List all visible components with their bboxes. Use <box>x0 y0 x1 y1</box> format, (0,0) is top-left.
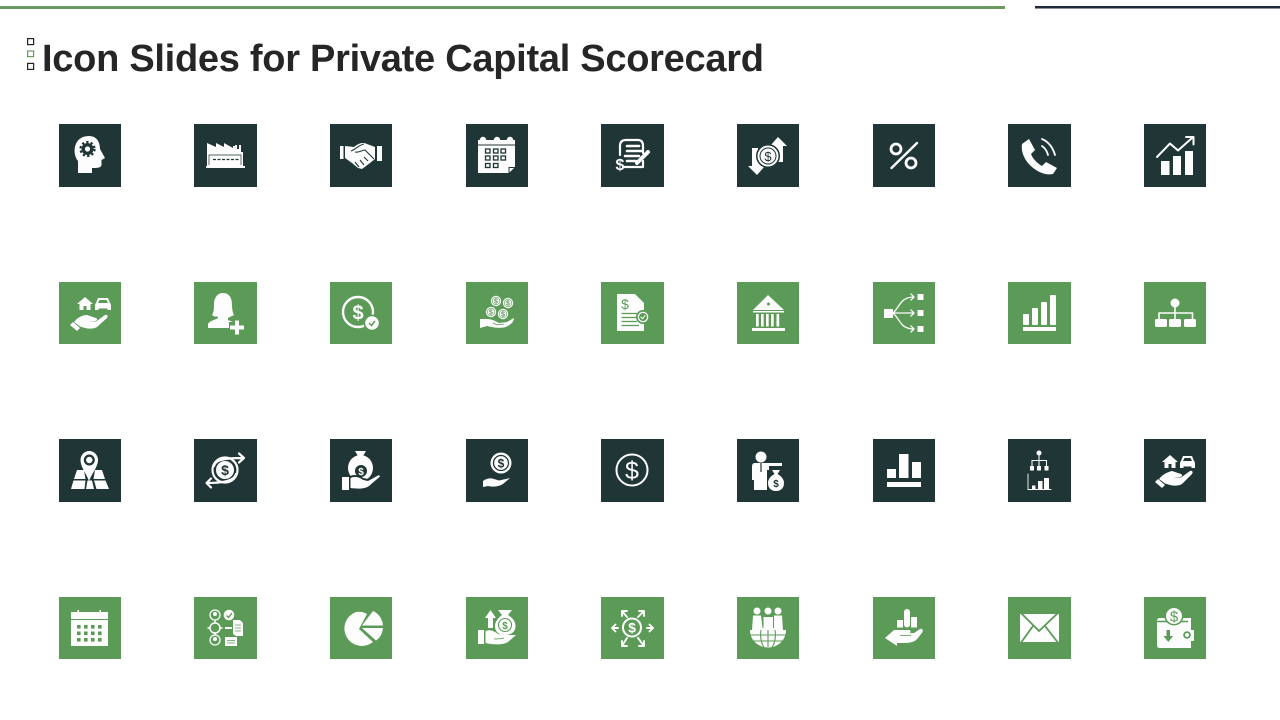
icon: coin above hand: $ <box>498 456 505 470</box>
icon: signed document with dollar: $ <box>616 157 625 174</box>
icon: branching flow <box>873 282 935 344</box>
icon: invoice with dollar and check: $ <box>621 296 629 312</box>
icon: coins falling into hand: $ <box>501 312 505 318</box>
icon: phone call <box>1008 124 1071 187</box>
icon: coin above hand <box>466 439 528 502</box>
icon: envelope <box>1008 597 1071 659</box>
icon: money bag on hand: $ <box>358 467 364 478</box>
top accent bar: dark <box>1035 6 1280 8</box>
icon: dollar circle with check <box>330 282 392 344</box>
title bullets <box>28 39 34 69</box>
icon: dollar with radiating arrows: $ <box>628 620 636 636</box>
icon: head with gear <box>59 124 121 187</box>
icon: percent <box>873 124 935 187</box>
icon: coins falling into hand: $ <box>494 298 498 306</box>
icon: dollar exchange arrows <box>194 439 257 502</box>
icon: wallet with coin <box>1144 597 1206 659</box>
icon: handshake <box>330 124 392 187</box>
top accent bar: green <box>0 6 1005 9</box>
icon: dollar with up and down arrows <box>737 124 799 187</box>
icon: factory <box>194 124 257 187</box>
icon: dollar with up and down arrows: $ <box>764 149 772 164</box>
icon: rising bar chart with arrow <box>1144 124 1206 187</box>
icon: woman with plus <box>194 282 257 344</box>
icon: money bag, up arrow and hand <box>466 597 528 659</box>
icon: ascending bars <box>1008 282 1071 344</box>
icon: calendar with grid <box>466 124 528 187</box>
icon: coins falling into hand <box>466 282 528 344</box>
icon: wallet with coin: $ <box>1170 608 1179 626</box>
icon: money bag, up arrow and hand: $ <box>502 621 508 632</box>
icon: bank building <box>737 282 799 344</box>
icon: dollar exchange arrows: $ <box>221 462 229 478</box>
title: Icon Slides for Private Capital Scorecard <box>42 38 764 80</box>
icon: money bag on hand <box>330 439 392 502</box>
icon: dollar circle: $ <box>625 457 639 485</box>
icon: hand holding house and car, dark <box>1144 439 1206 502</box>
icon: businessman with money bag <box>737 439 799 502</box>
icon: pie chart <box>330 597 392 659</box>
icon: people on globe <box>737 597 799 659</box>
icon: hierarchy with chart <box>1008 439 1071 502</box>
icon: organization chart <box>1144 282 1206 344</box>
icon: hand holding house and car <box>59 282 121 344</box>
icon: calendar <box>59 597 121 659</box>
icon: bar chart <box>873 439 935 502</box>
icon: hand with bars <box>873 597 935 659</box>
icon: dollar with radiating arrows <box>601 597 664 659</box>
icon: invoice with dollar and check <box>601 282 664 344</box>
icon: dollar circle <box>601 439 664 502</box>
icon: coins falling into hand: $ <box>506 300 510 308</box>
icon: businessman with money bag: $ <box>773 479 779 490</box>
icon: coins falling into hand: $ <box>489 310 493 316</box>
icon: people process documents <box>194 597 257 659</box>
icon: map pin on tiles <box>59 439 121 502</box>
icon: signed document with dollar <box>601 124 664 187</box>
icon: dollar circle with check: $ <box>352 302 364 324</box>
